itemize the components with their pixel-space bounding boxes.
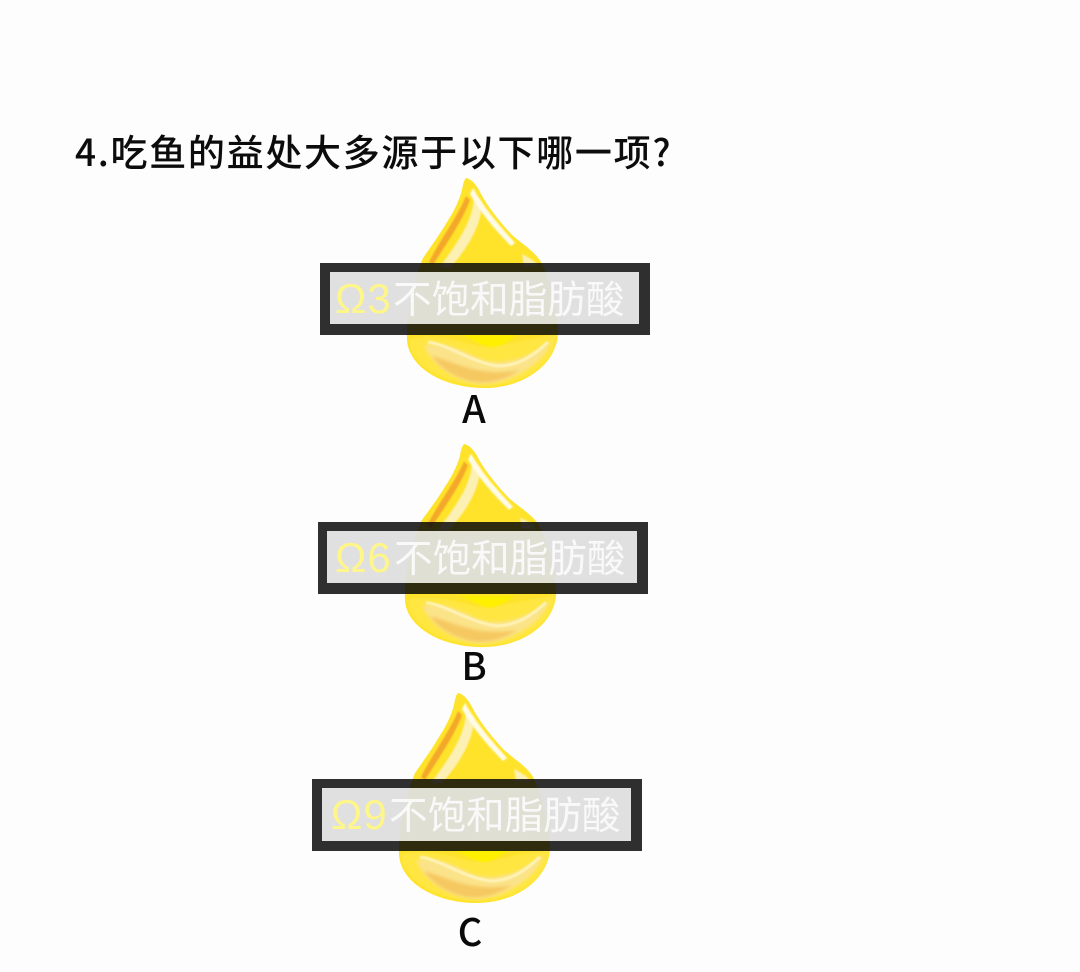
label text A: Ω3	[335, 275, 392, 322]
icon: oil drop A	[407, 178, 558, 388]
icon: oil drop B	[405, 444, 556, 647]
label bar C	[312, 779, 642, 851]
label text B: 不饱和脂肪酸	[394, 528, 625, 584]
label bar A	[320, 263, 650, 335]
label text A: 不饱和脂肪酸	[393, 269, 624, 325]
label text B: Ω6	[335, 534, 392, 581]
option letter A: A	[462, 379, 486, 434]
label text C: Ω9	[331, 791, 388, 838]
label bar B	[318, 522, 648, 594]
option A	[320, 178, 650, 434]
icon: oil drop C	[399, 693, 550, 903]
option letter C: C	[458, 902, 482, 957]
title: 4.吃鱼的益处大多源于以下哪一项?	[75, 123, 672, 177]
option C	[312, 693, 642, 957]
option B	[318, 444, 648, 691]
option letter B: B	[461, 636, 487, 691]
label text C: 不饱和脂肪酸	[389, 785, 620, 841]
